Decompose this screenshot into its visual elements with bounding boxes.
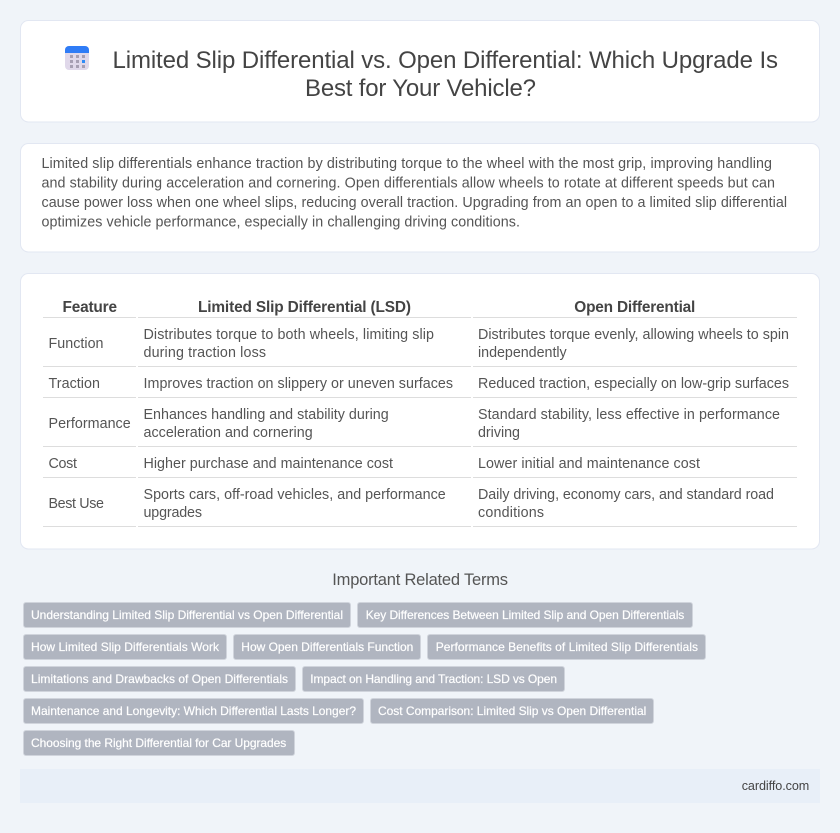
title: Best for Your Vehicle? <box>305 75 536 102</box>
row: traction: Improves traction on slippery or uneven surfaces <box>144 376 453 392</box>
row: function: Distributes torque evenly, allowing wheels to spin <box>478 327 789 343</box>
table header: Feature <box>62 299 117 316</box>
text block: description <box>42 156 787 230</box>
row: function: during traction loss <box>144 345 266 361</box>
tag <box>24 730 294 756</box>
tag <box>24 698 364 724</box>
table header: Open Differential <box>574 299 695 316</box>
row: function: Distributes torque to both wheels, limiting slip <box>144 327 434 343</box>
row: performance: acceleration and cornering <box>144 425 313 441</box>
tag list: related terms <box>24 602 706 756</box>
row: traction: Traction <box>48 376 100 392</box>
tag <box>24 634 226 660</box>
table header: Limited Slip Differential (LSD) <box>198 299 411 316</box>
tag <box>24 666 296 692</box>
tag: How Open Differentials Function <box>241 640 413 654</box>
tag: Key Differences Between Limited Slip and Open Differentials <box>366 608 684 622</box>
row: function: independently <box>478 345 568 361</box>
panel: header <box>20 20 820 122</box>
tag: Impact on Handling and Traction: LSD vs Open <box>310 672 557 686</box>
tag: Understanding Limited Slip Differential vs Open Differential <box>31 608 343 622</box>
heading: related terms: Important Related Terms <box>332 571 508 589</box>
panel: description <box>20 144 820 252</box>
row: performance: Standard stability, less effective in performance <box>478 407 780 423</box>
row: cost: Higher purchase and maintenance cost <box>144 456 393 472</box>
tag <box>234 634 420 660</box>
row: performance: Performance <box>48 416 131 432</box>
row: function <box>48 327 789 361</box>
row: performance: Enhances handling and stability during <box>144 407 389 423</box>
tag: Maintenance and Longevity: Which Differential Lasts Longer? <box>31 704 356 718</box>
row: traction: Reduced traction, especially on low-grip surfaces <box>478 376 789 392</box>
row: performance: driving <box>478 425 520 441</box>
row: cost <box>48 456 700 472</box>
text block: description: Limited slip differentials enhance traction by distributing torque to the wheel with the most grip, improving handling <box>42 156 772 172</box>
tag: Choosing the Right Differential for Car Upgrades <box>31 736 286 750</box>
tag: Cost Comparison: Limited Slip vs Open Differential <box>378 704 646 718</box>
row: cost: Cost <box>48 456 77 472</box>
tag <box>428 634 706 660</box>
panel: comparison table <box>20 274 820 549</box>
tag <box>302 666 564 692</box>
text block: description: cause power loss when one wheel slips, reducing overall traction. Upgrading from an open to a limited slip differential <box>42 195 787 211</box>
tag <box>358 602 692 628</box>
tag: Limitations and Drawbacks of Open Differentials <box>31 672 288 686</box>
text block: description: and stability during acceleration and cornering. Open differentials allow wheels to rotate at different speeds but can <box>42 176 775 192</box>
tag <box>24 602 350 628</box>
icon: calendar <box>65 46 89 70</box>
tag <box>370 698 654 724</box>
text block: description: optimizes vehicle performance, especially in challenging driving conditions. <box>42 214 520 230</box>
table header <box>62 299 695 316</box>
row: best use: Best Use <box>48 496 104 512</box>
tag: Performance Benefits of Limited Slip Differentials <box>436 640 698 654</box>
row: function: Function <box>48 336 104 352</box>
row: best use: conditions <box>478 505 544 521</box>
title <box>112 47 778 102</box>
title: Limited Slip Differential vs. Open Differential: Which Upgrade Is <box>112 47 778 74</box>
tag: How Limited Slip Differentials Work <box>31 640 220 654</box>
row: best use: Daily driving, economy cars, and standard road <box>478 487 774 503</box>
row: best use: Sports cars, off-road vehicles, and performance <box>144 487 446 503</box>
row: traction <box>48 376 789 392</box>
row: best use <box>48 487 774 521</box>
row: best use: upgrades <box>144 505 202 521</box>
footer <box>20 769 820 803</box>
footer: cardiffo.com <box>742 779 809 793</box>
row: performance <box>48 407 780 441</box>
row: cost: Lower initial and maintenance cost <box>478 456 700 472</box>
